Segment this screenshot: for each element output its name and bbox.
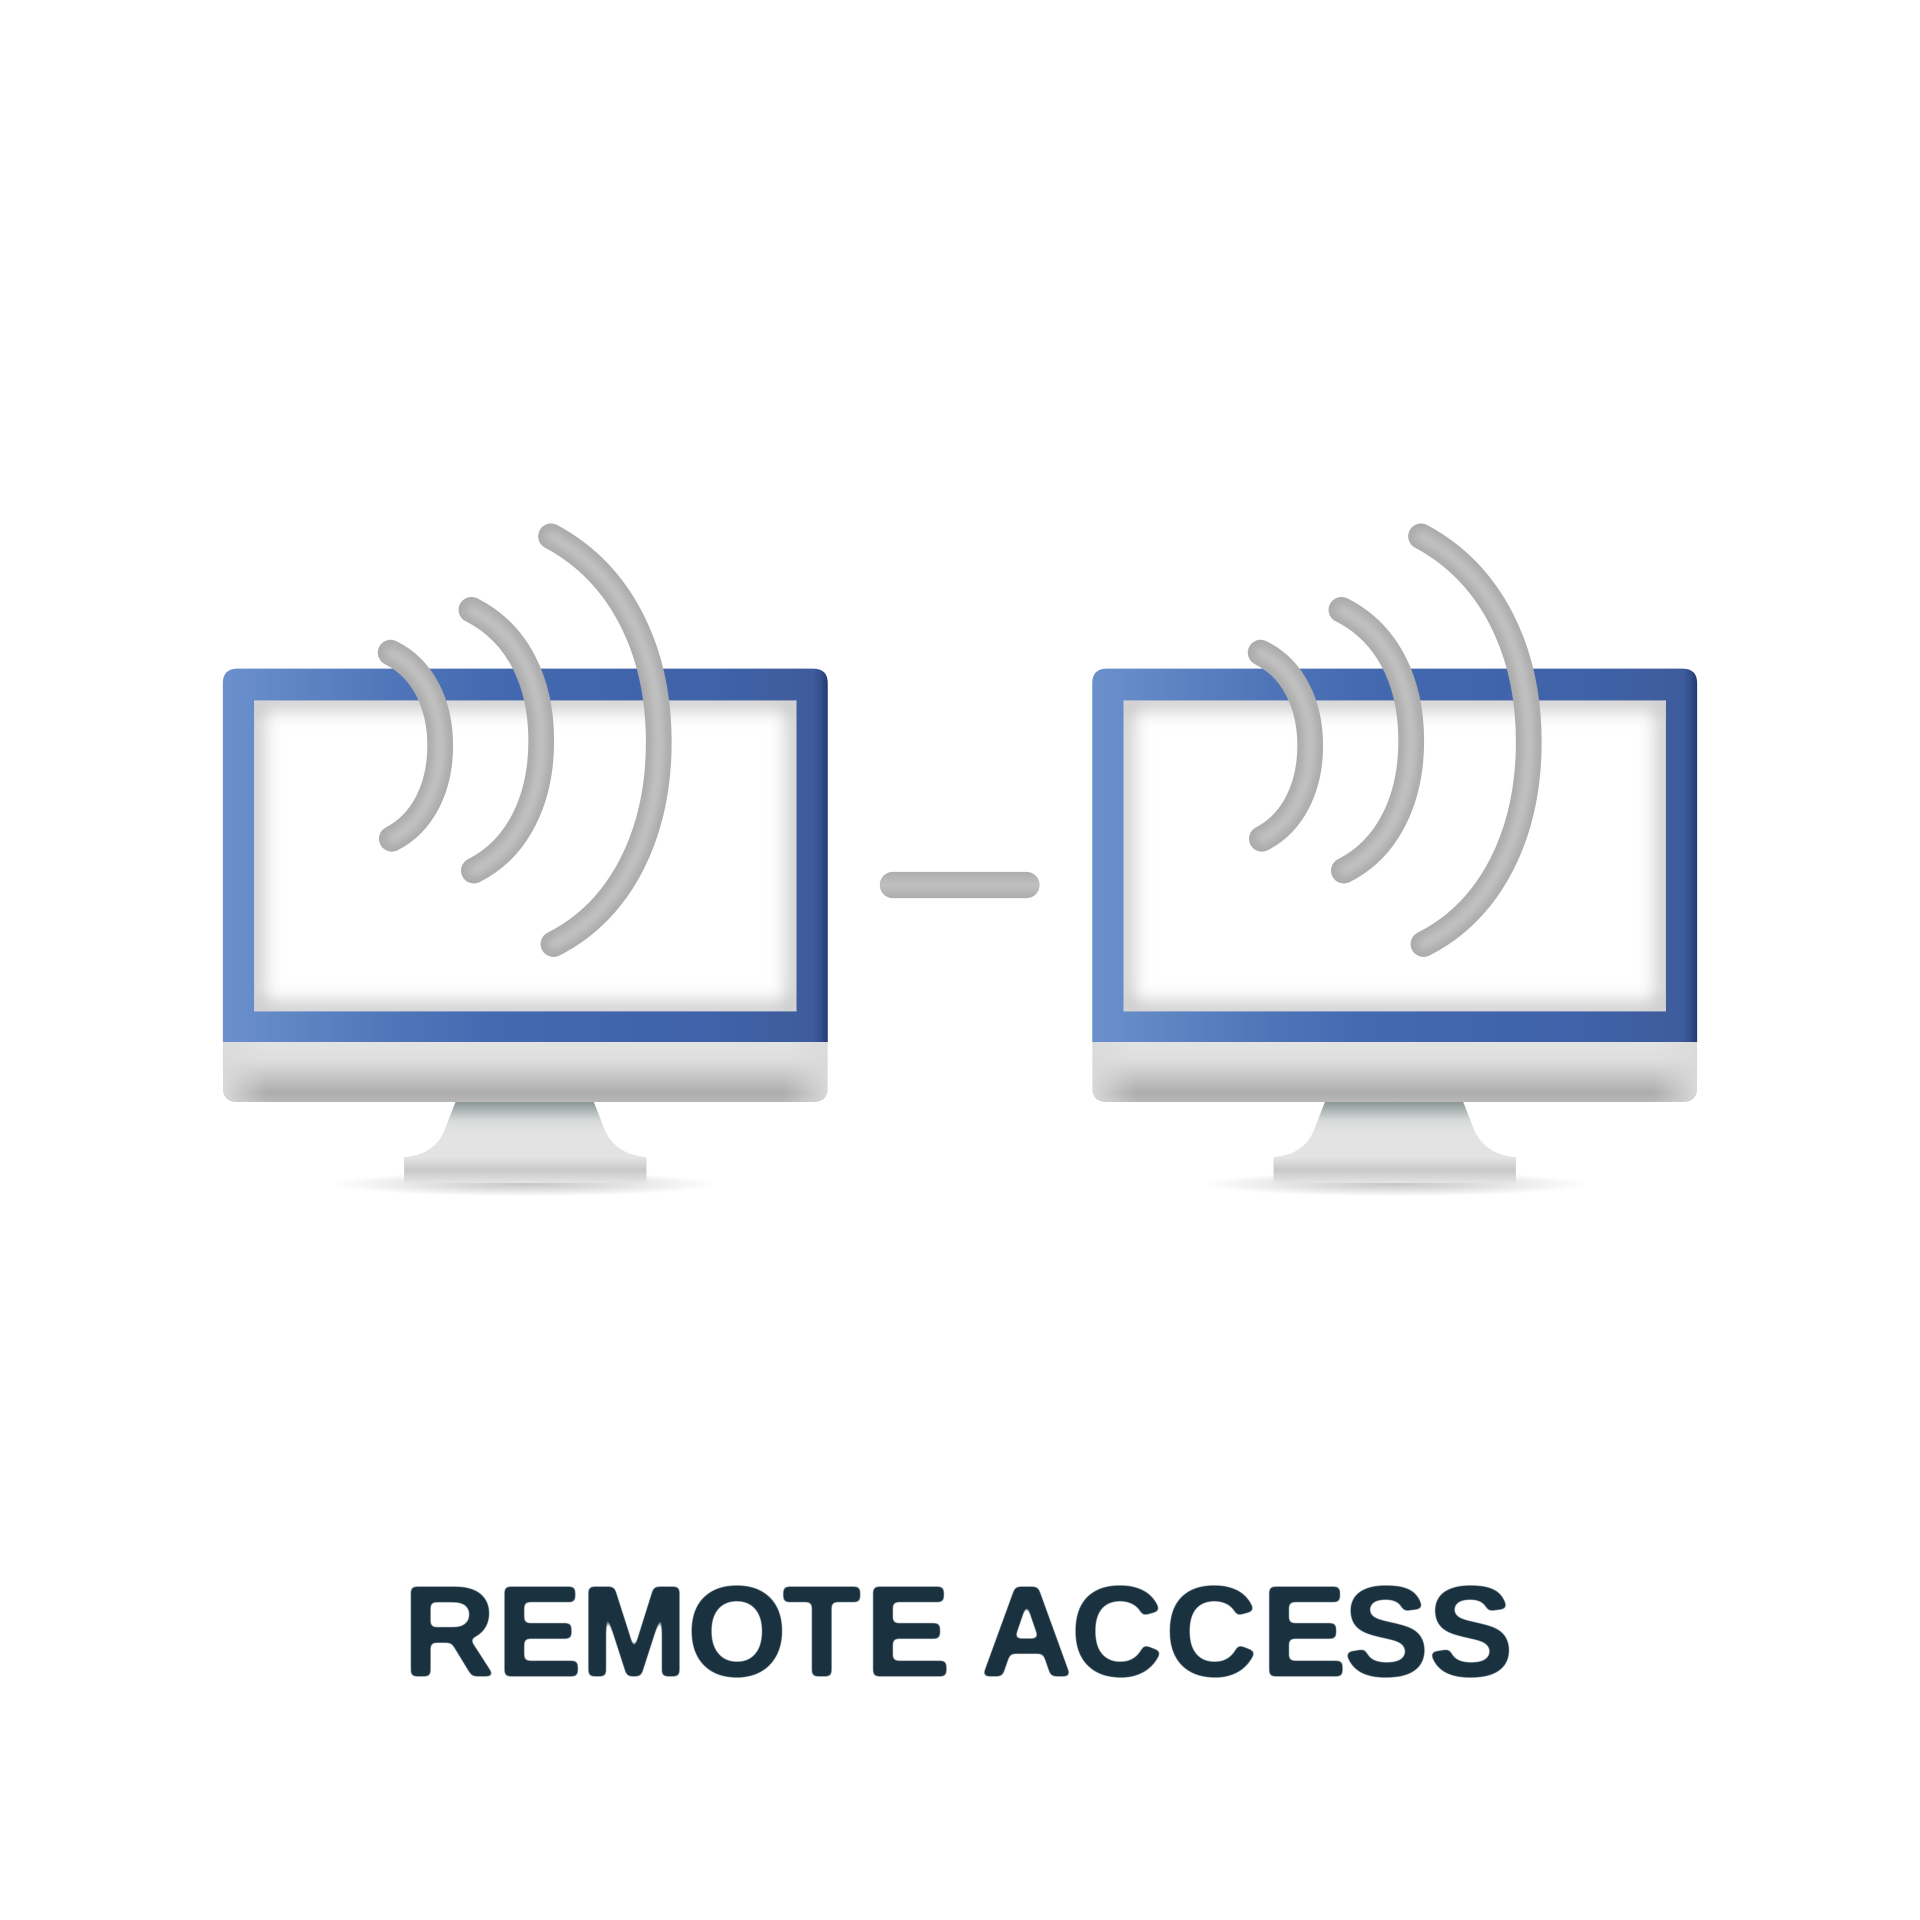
left monitor with wireless signal <box>223 536 828 1196</box>
infographic canvas <box>222 524 1698 1678</box>
left monitor stand <box>404 1102 647 1163</box>
right monitor base <box>1273 1157 1516 1183</box>
left monitor blue frame <box>223 669 828 1042</box>
connector dash <box>880 872 1040 898</box>
right monitor screen <box>1123 700 1666 1011</box>
right monitor chin <box>1092 1042 1697 1102</box>
right monitor blue frame <box>1092 669 1697 1042</box>
left monitor screen <box>254 700 797 1011</box>
left signal waves <box>391 536 659 944</box>
right signal waves <box>1261 536 1529 944</box>
right monitor shadow <box>1202 1172 1587 1196</box>
left monitor shadow <box>333 1172 718 1196</box>
title: REMOTE ACCESS <box>403 1561 1514 1704</box>
left monitor base <box>404 1157 647 1183</box>
right monitor with wireless signal <box>1092 536 1697 1196</box>
right monitor stand <box>1273 1102 1516 1163</box>
left monitor chin <box>223 1042 828 1102</box>
